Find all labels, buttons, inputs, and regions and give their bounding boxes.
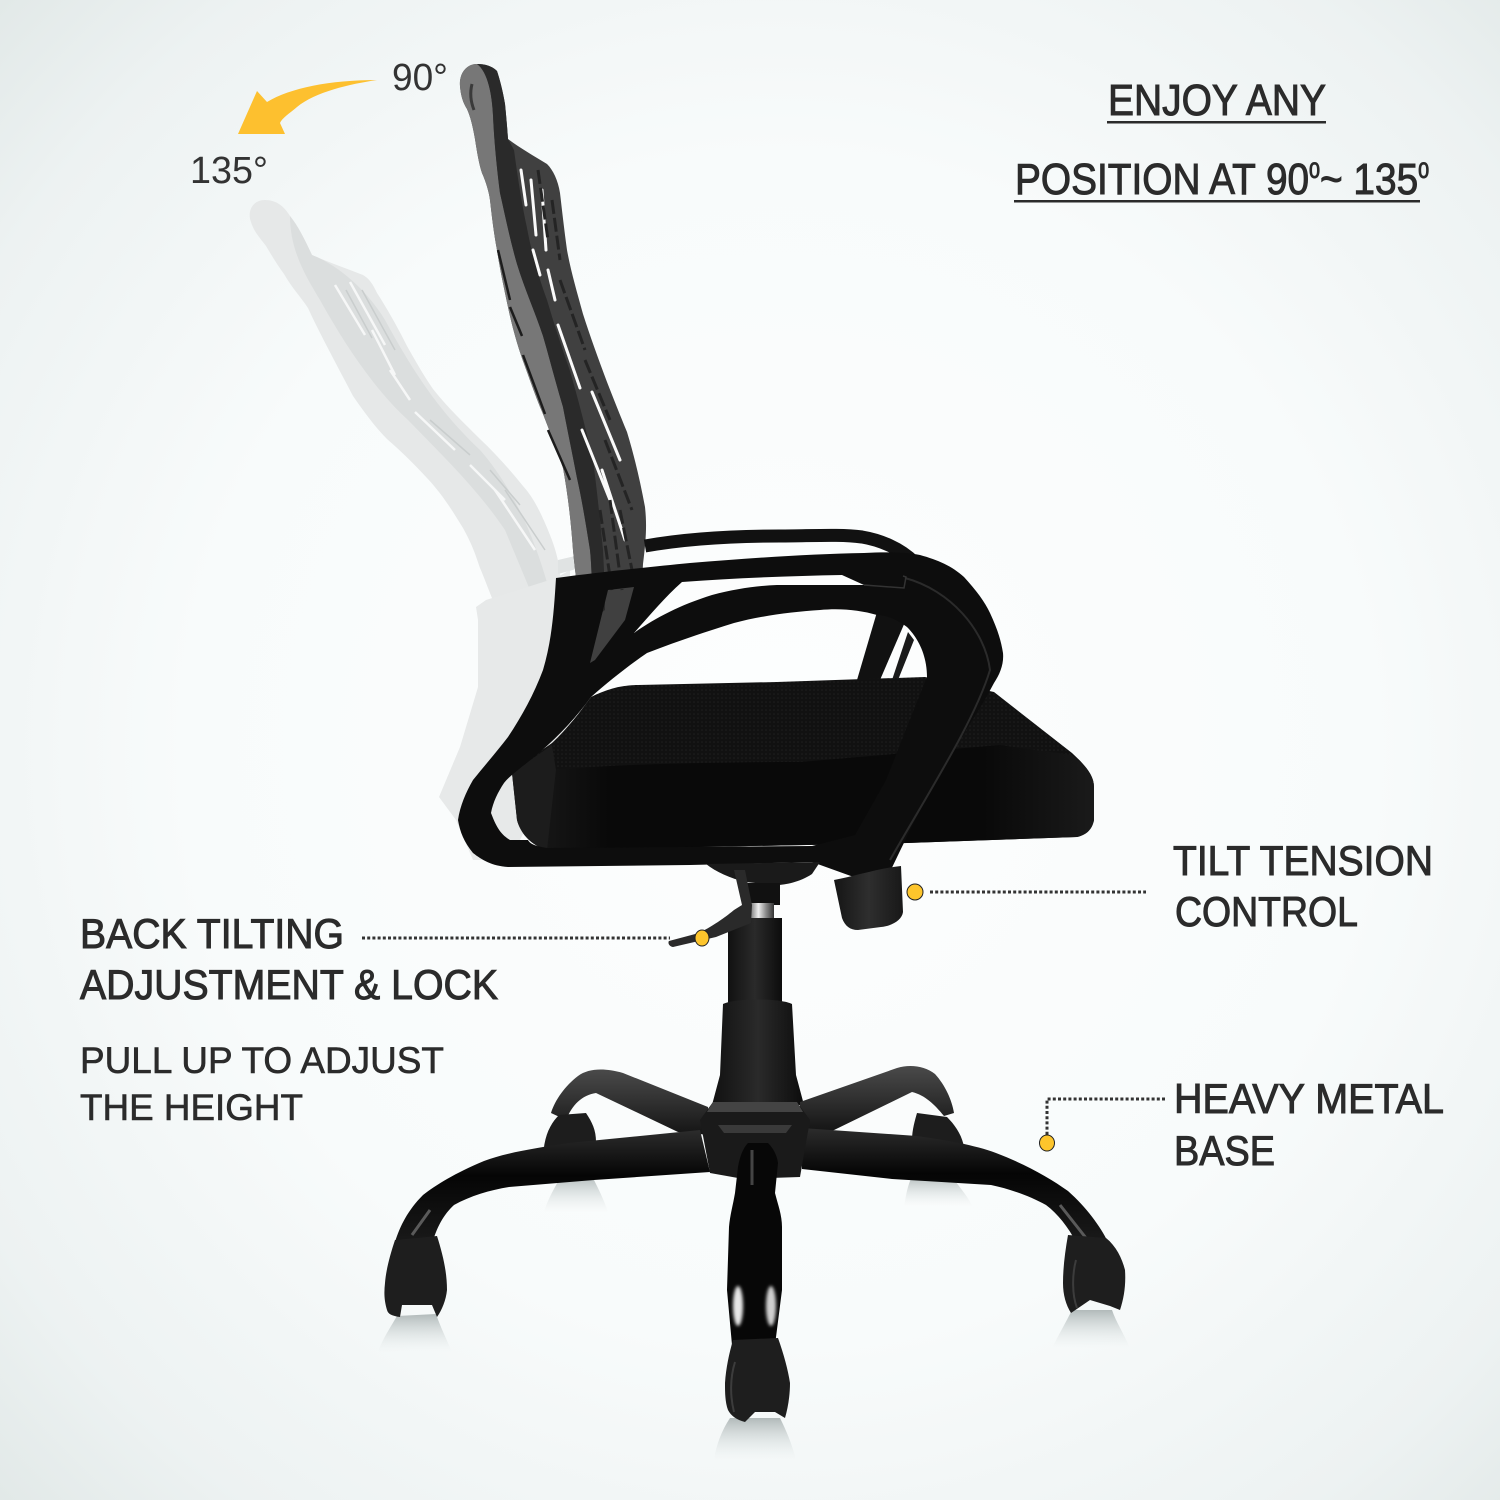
label 135 degrees: 135°: [190, 150, 268, 192]
callout: heavy metal base: [1174, 1075, 1444, 1174]
leader line and marker: back tilt: [362, 930, 709, 946]
front center base leg: [727, 1143, 782, 1345]
base hub: [700, 1102, 810, 1178]
back tilt lever: [668, 870, 752, 947]
backrest mesh: [460, 64, 646, 670]
heading: ENJOY ANY: [1108, 76, 1326, 125]
callout: pull up to adjust the height: THE HEIGHT: [80, 1087, 303, 1128]
heading: 0: [1309, 158, 1320, 183]
heading: [1014, 76, 1429, 204]
leader line and marker: metal base: [1040, 1099, 1165, 1151]
ghost seat bracket: [558, 556, 580, 574]
arm slot: [864, 576, 906, 588]
leader line and marker: tilt tension: [907, 884, 1146, 900]
callout: tilt tension control: CONTROL: [1175, 888, 1358, 935]
rear base legs and casters: [544, 1066, 964, 1147]
callout: heavy metal base: BASE: [1174, 1127, 1275, 1174]
callout: back tilting adjustment and lock: ADJUSTMENT & LOCK: [80, 961, 498, 1008]
armrest highlights: [890, 578, 990, 860]
callout: pull up to adjust the height: [80, 1040, 444, 1128]
rotation arrow: [238, 80, 377, 134]
rear armrest bar: [645, 535, 914, 562]
heading: POSITION AT 90: [1015, 155, 1348, 204]
callout: tilt tension control: [1173, 837, 1433, 935]
callout: back tilting adjustment and lock: [80, 910, 498, 1008]
heading: 0: [1418, 158, 1429, 183]
tilt tension knob: [834, 866, 903, 930]
gas lift column: [712, 883, 804, 1105]
casters: [384, 1235, 1125, 1422]
front base legs: [395, 1128, 1108, 1245]
thin rear strut: [892, 632, 914, 680]
rear arm strut: [857, 612, 905, 680]
callout: back tilting adjustment and lock: BACK TILTING: [80, 910, 344, 957]
front armrest frame: [458, 552, 1003, 880]
caster floor shadows: [378, 1176, 1130, 1460]
heading: ~ 135: [1320, 155, 1418, 204]
seat mechanism plate: [706, 862, 820, 885]
callout: heavy metal base: HEAVY METAL: [1174, 1075, 1444, 1122]
ghost backrest at 135 degrees: [250, 200, 560, 610]
ghost lower back panel: [439, 570, 570, 860]
callout: tilt tension control: TILT TENSION: [1173, 837, 1433, 884]
seat cushion: [512, 677, 1094, 850]
callout: pull up to adjust the height: PULL UP TO ADJUST: [80, 1040, 444, 1081]
label 90 degrees: 90°: [392, 57, 448, 99]
